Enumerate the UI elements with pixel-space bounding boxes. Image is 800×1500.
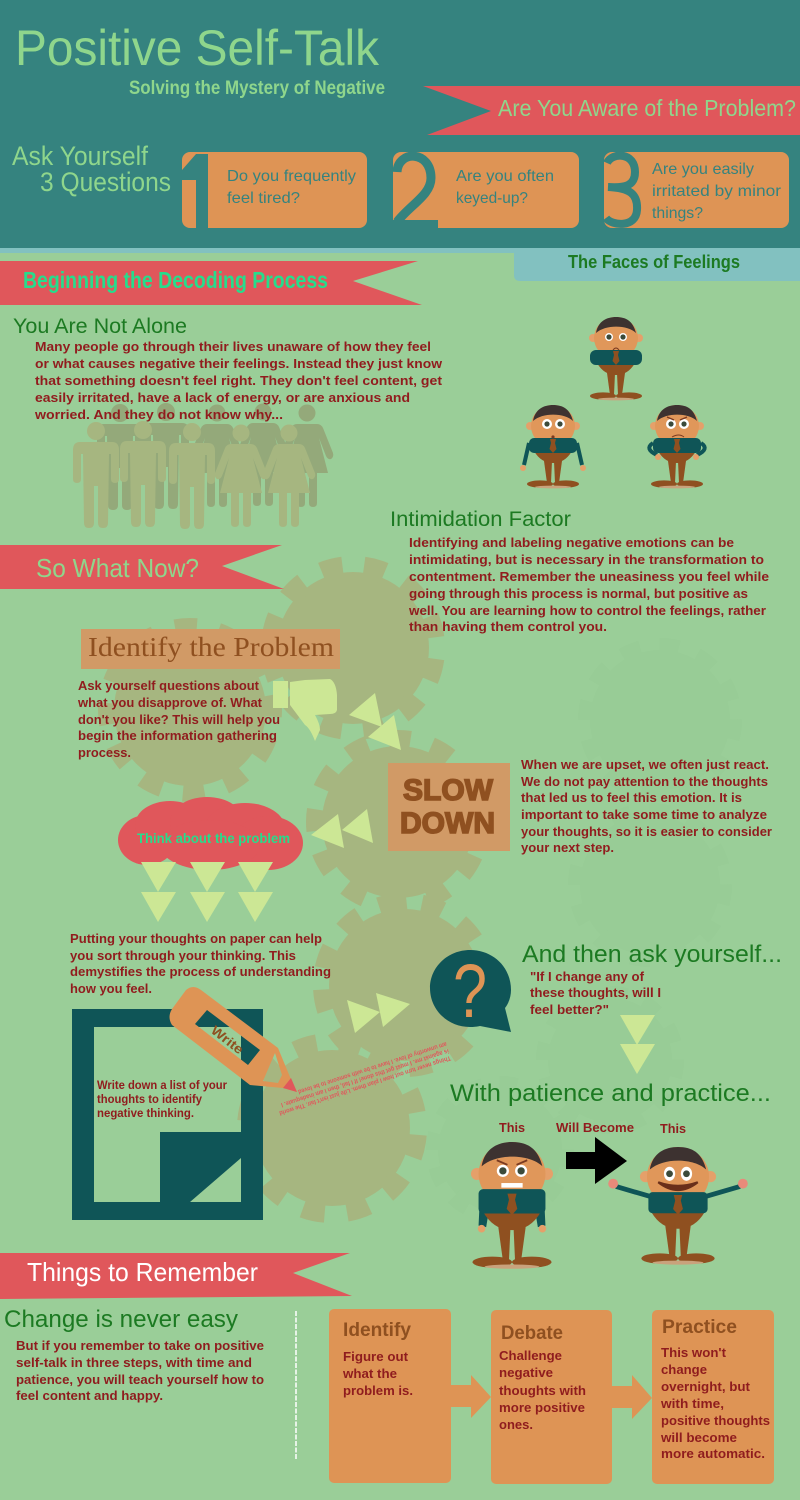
text: you are not alone: worried. And they do not know why...	[34, 407, 283, 422]
text: intimidation factor: Identifying and labeling negative emotions can be	[409, 535, 734, 550]
step: debate: thoughts with	[499, 1383, 586, 1398]
labels: this will become this: This	[660, 1121, 686, 1136]
character: annoyed face	[649, 405, 705, 488]
heading: ask yourself: Ask Yourself	[12, 141, 148, 171]
text: putting your thoughts on paper: you sort through your thinking. This	[70, 948, 296, 963]
icon: notepad	[72, 1009, 263, 1220]
banner: things to remember	[0, 1253, 352, 1299]
heading: identify the problem	[81, 629, 340, 669]
step: identify	[329, 1309, 451, 1483]
step: practice: more automatic.	[661, 1446, 765, 1461]
heading: identify the problem: Identify the Problem	[88, 632, 334, 662]
arrow: will become	[566, 1137, 627, 1184]
arrows: from slow down	[311, 809, 373, 848]
icon: pencil: Write	[208, 1023, 247, 1057]
text: when we are upset: important to take some time to analyze	[521, 807, 767, 822]
banner: things to remember: Things to Remember	[27, 1257, 258, 1287]
text: putting your thoughts on paper	[70, 931, 331, 996]
labels: this will become this	[499, 1120, 686, 1136]
question 2	[393, 152, 579, 228]
text: putting your thoughts on paper: demystifies the process of understanding	[70, 964, 331, 979]
text: upside-down negative thoughts: Things never turn out how I plan them. Life just isn't fair. The world	[278, 1054, 452, 1116]
step: practice: overnight, but	[661, 1379, 751, 1394]
question 3	[604, 152, 789, 228]
step: debate	[491, 1310, 612, 1484]
arrows: down to patience	[620, 1015, 655, 1074]
text: when we are upset: When we are upset, we often just react.	[521, 757, 769, 772]
callout: slow down	[388, 763, 510, 851]
icon: notepad: negative thinking.	[97, 1106, 194, 1120]
icon: crowd of people	[73, 403, 333, 529]
icon: question bubble	[430, 949, 511, 1034]
text: putting your thoughts on paper: Putting your thoughts on paper can help	[70, 931, 322, 946]
text: when we are upset: We do not pay attention to the thoughts	[521, 774, 768, 789]
step: identify: problem is.	[343, 1383, 413, 1398]
icon: thought cloud: Think about the problem	[137, 830, 290, 846]
faint background gears	[435, 648, 732, 1215]
text: you are not alone: that something doesn't feel right. They don't feel content, get	[35, 373, 443, 388]
tab: the faces of feelings	[514, 252, 800, 281]
text: intimidation factor: than having them control you.	[409, 619, 607, 634]
callout: slow down: DOWN	[400, 807, 495, 840]
icon: pencil	[170, 987, 297, 1092]
step: identify: Figure out	[343, 1349, 409, 1364]
banner: beginning the decoding process: Beginning the Decoding Process	[23, 267, 328, 293]
text: identify the problem: Ask yourself questions about	[78, 678, 260, 693]
banner: so what now: So What Now?	[36, 553, 199, 583]
text: intimidation factor: intimidating, but is necessary in the transformation to	[409, 552, 764, 567]
text: intimidation factor: contentment. Remember the uneasiness you feel while	[409, 569, 769, 584]
text: putting your thoughts on paper: how you feel.	[70, 981, 152, 996]
text: identify the problem: don't you like? This will help you	[78, 712, 280, 727]
question 2: keyed-up?	[456, 190, 528, 207]
text: quote: these thoughts, will I	[530, 985, 661, 1000]
heading: and then ask yourself: And then ask yourself...	[522, 941, 782, 968]
banner: are you aware	[423, 86, 800, 135]
text: change is never easy: self-talk in three steps, with time and	[16, 1355, 252, 1370]
heading: ask yourself	[12, 141, 171, 197]
text: change is never easy: feel content and happy.	[16, 1388, 163, 1403]
arrow: debate to practice	[611, 1375, 652, 1419]
text: identify the problem: what you disapprove of. What	[77, 695, 263, 710]
labels: this will become this: Will Become	[556, 1120, 634, 1135]
gears chain	[86, 557, 501, 1219]
step: practice: This won't	[661, 1345, 727, 1360]
labels: this will become this: This	[499, 1120, 525, 1135]
step: practice: Practice	[662, 1317, 737, 1338]
text: change is never easy: patience, you will teach yourself how to	[16, 1372, 264, 1387]
tab: the faces of feelings: The Faces of Feelings	[568, 252, 740, 272]
arrows: down from cloud	[141, 862, 273, 922]
heading: ask yourself: 3 Questions	[40, 167, 171, 197]
text: identify the problem: process.	[78, 745, 131, 760]
question 3: Are you easily	[652, 161, 754, 178]
text: intimidation factor: well. You are learning how to control the feelings, rather	[408, 603, 766, 618]
question 1: feel tired?	[227, 190, 300, 207]
step: debate: negative	[499, 1365, 553, 1380]
character: angry face	[471, 1142, 553, 1269]
banner: so what now	[0, 545, 284, 589]
text: change is never easy	[16, 1338, 264, 1403]
header band	[0, 0, 800, 253]
heading: you are not alone: You Are Not Alone	[13, 315, 187, 338]
icon: thumbs down	[273, 679, 337, 741]
icon: question bubble: ?	[453, 949, 487, 1034]
text: change is never easy: But if you remember to take on positive	[16, 1338, 264, 1353]
question 3: irritated by minor	[652, 183, 782, 200]
text: quote: feel better?"	[530, 1002, 609, 1017]
text: upside-down negative thoughts: am unworthy of love. I have to be with someone to be loved	[297, 1040, 448, 1095]
text: upside-down negative thoughts: is against me. I must get this done! If I fail, then I am inadequate. I	[280, 1047, 450, 1108]
step: practice: positive thoughts	[661, 1413, 770, 1428]
question 3: things?	[652, 205, 703, 222]
text: you are not alone: easily irritated, have a lack of energy, or are anxious and	[35, 390, 410, 405]
step: debate: ones.	[499, 1417, 533, 1432]
text: when we are upset	[521, 757, 772, 855]
question 1: Do you frequently	[227, 168, 356, 185]
step: debate: more positive	[499, 1400, 585, 1415]
heading: intimidation factor: Intimidation Factor	[390, 508, 571, 531]
question 1	[182, 152, 367, 228]
step: debate: Debate	[501, 1323, 563, 1344]
text: when we are upset: your next step.	[521, 840, 614, 855]
step: practice: will become	[660, 1430, 737, 1445]
heading: with patience and practice: With patience and practice...	[450, 1080, 771, 1107]
icon: notepad: Write down a list of your	[97, 1078, 227, 1092]
text: intimidation factor: going through this process is normal, but positive as	[409, 586, 748, 601]
arrows: to slow down	[349, 693, 401, 750]
step: debate: Challenge	[499, 1348, 562, 1363]
text: when we are upset: that led us to feel this emotion. It is	[521, 790, 742, 805]
text: quote	[530, 969, 661, 1017]
step: identify: Identify	[343, 1320, 411, 1341]
character: surprised face	[520, 405, 586, 488]
icon: thought cloud	[118, 797, 303, 870]
text: intimidation factor	[408, 535, 769, 634]
step: practice: with time,	[660, 1396, 724, 1411]
subtitle: Solving the Mystery of Negative	[129, 78, 385, 99]
step: practice: change	[661, 1362, 707, 1377]
arrows: to question bubble	[347, 993, 410, 1033]
text: you are not alone: Many people go through their lives unaware of how they feel	[35, 339, 431, 354]
text: you are not alone: or what causes negative their feelings. Instead they just know	[35, 356, 443, 371]
callout: slow down: SLOW	[403, 774, 494, 807]
text: identify the problem	[77, 678, 280, 760]
heading: change is never easy: Change is never easy	[4, 1306, 238, 1333]
text: identify the problem: begin the information gathering	[78, 728, 277, 743]
text: you are not alone	[34, 339, 443, 422]
icon: notepad: thoughts to identify	[97, 1092, 202, 1106]
banner: beginning the decoding process	[0, 261, 422, 305]
question 2: Are you often	[456, 168, 554, 185]
text: when we are upset: your thoughts, so it is easier to consider	[521, 824, 772, 839]
text: quote: "If I change any of	[530, 969, 645, 984]
step: practice	[652, 1310, 774, 1484]
character: happy face	[608, 1147, 748, 1265]
title: Positive Self-Talk	[15, 20, 380, 76]
arrow: identify to debate	[450, 1375, 491, 1418]
step: identify: what the	[342, 1366, 397, 1381]
character: sad face	[589, 317, 643, 400]
